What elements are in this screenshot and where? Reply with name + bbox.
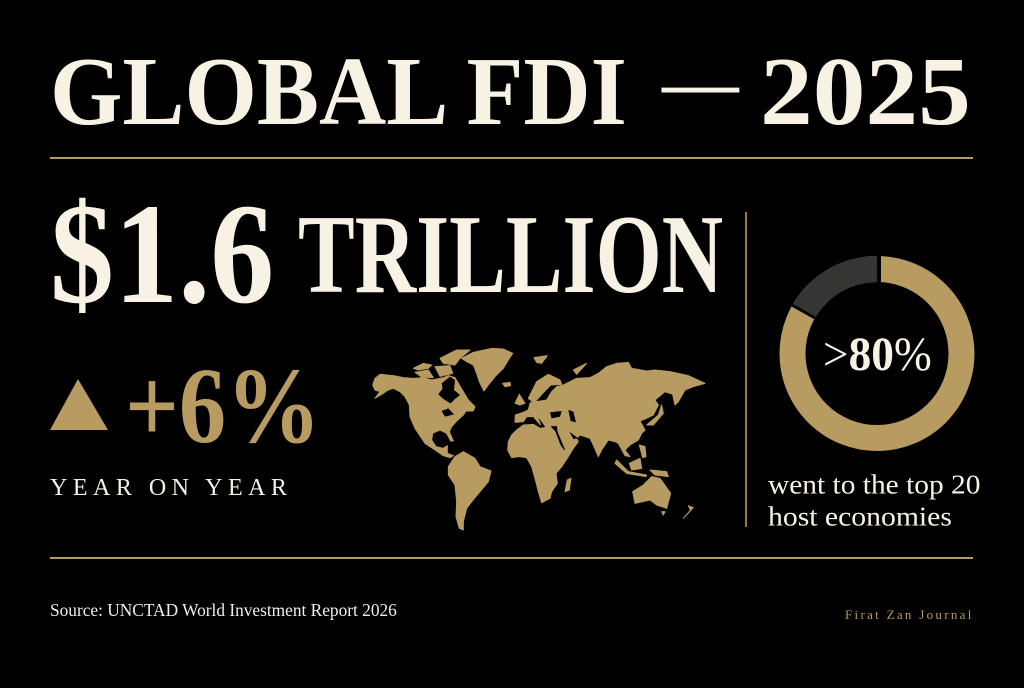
title: GLOBAL FDI xyxy=(50,37,627,146)
headline figure: $1.6 xyxy=(50,175,274,334)
arctic islands xyxy=(413,363,432,370)
eurasia xyxy=(515,362,705,457)
donut chart xyxy=(791,253,962,438)
credit: Firat Zan Journal xyxy=(845,607,974,622)
novaya zemlya xyxy=(573,363,587,374)
donut caption xyxy=(768,471,980,532)
title xyxy=(50,27,971,146)
headline figure: TRILLION xyxy=(298,192,723,317)
title: — xyxy=(661,27,740,135)
southeast asia islands xyxy=(615,460,647,477)
africa xyxy=(508,424,573,503)
donut caption: host economies xyxy=(768,503,952,532)
world map xyxy=(373,348,705,530)
icon: up triangle xyxy=(50,379,108,430)
iceland xyxy=(503,382,511,387)
headline figure xyxy=(50,175,723,334)
source: Source: UNCTAD World Investment Report 2026 xyxy=(50,600,397,620)
scandinavia xyxy=(528,374,562,401)
title: 2025 xyxy=(760,37,971,146)
donut caption: went to the top 20 xyxy=(768,471,980,500)
greenland xyxy=(462,348,513,391)
madagascar xyxy=(565,478,571,492)
growth figure: +6% xyxy=(125,346,321,465)
australia xyxy=(633,477,671,508)
british isles xyxy=(515,394,525,405)
japan xyxy=(647,405,663,425)
growth label: YEAR ON YEAR xyxy=(50,475,292,501)
south america xyxy=(448,452,491,530)
donut value: >80% xyxy=(823,328,932,381)
north america xyxy=(373,374,475,458)
new zealand xyxy=(683,506,693,518)
svalbard xyxy=(534,356,547,363)
hudson bay xyxy=(438,377,460,403)
